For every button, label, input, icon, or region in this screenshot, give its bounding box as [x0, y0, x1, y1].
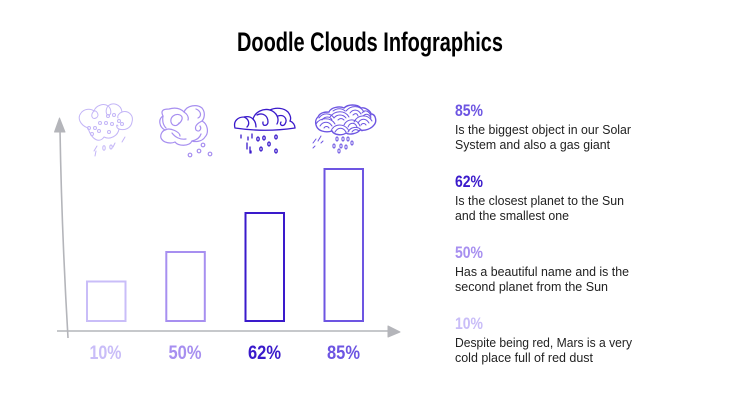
text block: 10%: 10% — [455, 314, 483, 333]
chart: bars with axes — [54, 118, 400, 364]
bar label: 85%: 85% — [327, 343, 360, 364]
icon: dotted cloud with rain — [79, 104, 132, 156]
bar label: 50%: 50% — [168, 343, 202, 364]
text block: 62%: 62% — [455, 172, 483, 191]
text block: 50%: 50% — [455, 243, 483, 262]
text block: 10%: Despite being red, Mars is a very — [455, 335, 632, 350]
bar: 50% — [166, 252, 205, 321]
bar: 10% — [87, 282, 126, 321]
title: Doodle Clouds Infographics — [237, 27, 503, 57]
text block: 85% — [455, 101, 632, 152]
text block: 10% — [455, 314, 632, 365]
bar: 62% — [246, 213, 284, 321]
text block: 50%: Has a beautiful name and is the — [455, 264, 629, 279]
icon: swirl cloud with dots — [160, 106, 212, 157]
bar label: 10%: 10% — [90, 343, 122, 364]
horizontal axis arrow — [57, 326, 400, 337]
bar: 85% — [324, 169, 363, 321]
text block: 50% — [455, 243, 629, 294]
text block: 62%: Is the closest planet to the Sun — [455, 193, 624, 208]
text block: 85%: Is the biggest object in our Solar — [455, 122, 632, 137]
icon: wavy outline cloud with rain — [235, 108, 295, 153]
text block: 85%: 85% — [455, 101, 483, 120]
vertical axis arrow — [54, 118, 68, 338]
text block: 62% — [455, 172, 624, 223]
text block: 85%: System and also a gas giant — [455, 137, 610, 152]
icon: scalloped cloud with rain — [313, 105, 376, 153]
text block: 50%: second planet from the Sun — [455, 279, 608, 294]
text block: 62%: and the smallest one — [455, 208, 569, 223]
bar label: 62%: 62% — [248, 343, 281, 364]
text block: 10%: cold place full of red dust — [455, 350, 593, 365]
